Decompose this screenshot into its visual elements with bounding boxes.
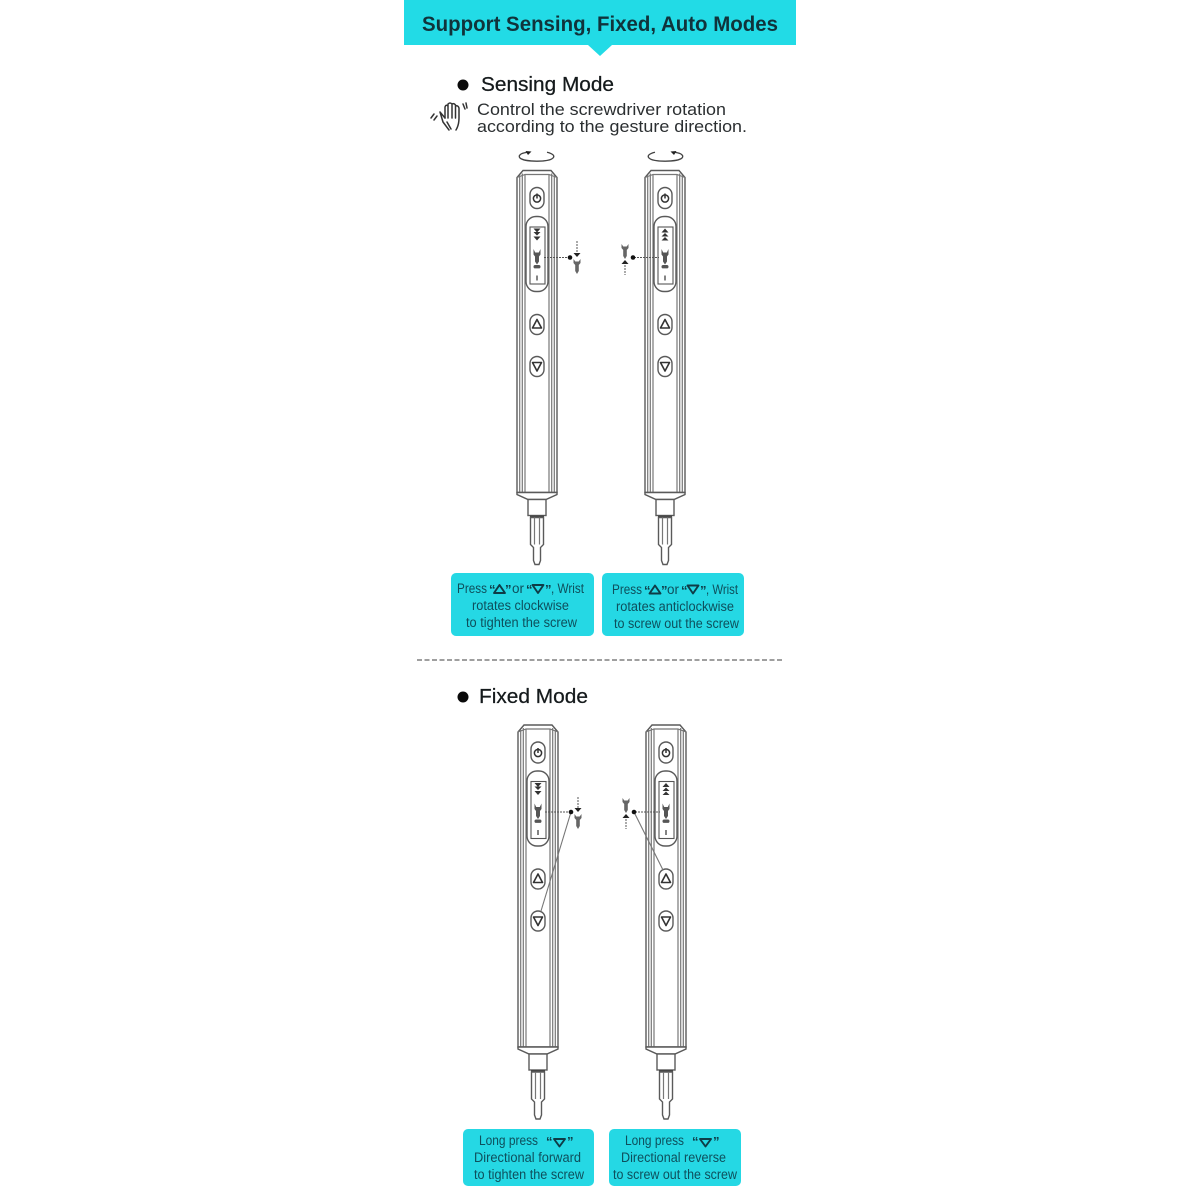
callout: press wrist clockwise: Press [457,581,487,596]
description: sensing mode: Control the screwdriver rotation [477,100,726,119]
callout: press wrist anticlockwise: “ [681,583,688,598]
indicator: forward screw with down button link [541,797,582,911]
screwdriver: fixed forward [518,725,558,1119]
callout: long press forward: to tighten the screw [474,1167,584,1182]
callout: long press forward: Directional forward [474,1150,581,1165]
callout: long press reverse: Directional reverse [621,1150,726,1165]
description: sensing mode: according to the gesture direction. [477,117,747,136]
callout: long press forward: Long press [479,1133,538,1148]
rotation arrow: anticlockwise [648,151,683,161]
screwdriver: sensing clockwise [517,170,557,564]
indicator: reverse screw with up button link [622,798,663,870]
heading: sensing mode: Sensing Mode [481,74,614,96]
callout: press wrist anticlockwise [602,573,744,636]
callout: long press forward: “ [546,1134,552,1149]
title banner: Support Sensing, Fixed, Auto Modes [422,12,778,36]
callout: press wrist clockwise [451,573,594,636]
callout: press wrist clockwise: , Wrist [551,581,584,596]
callout: press wrist anticlockwise: Press [612,582,642,597]
callout: press wrist clockwise: “ [526,582,532,597]
callout: press wrist clockwise: rotates clockwise [472,598,569,613]
indicator: loosen screw [622,244,659,275]
icon: gesture hand [431,103,467,130]
callout: press wrist anticlockwise: to screw out the screw [614,616,739,631]
callout: press wrist clockwise: “ [489,582,496,597]
screwdriver: sensing anticlockwise [645,170,685,564]
callout: press wrist anticlockwise: “ [644,583,650,598]
callout: long press reverse: ” [713,1134,720,1149]
callout: long press reverse: to screw out the screw [613,1167,737,1182]
heading: fixed mode: Fixed Mode [479,686,588,708]
callout: long press forward: ” [567,1134,574,1149]
callout: press wrist anticlockwise: rotates anticlockwise [616,599,734,614]
section divider [417,659,782,661]
rotation arrow: clockwise [519,151,554,161]
callout: press wrist clockwise: to tighten the screw [466,615,577,630]
callout: press wrist anticlockwise: , Wrist [706,582,738,597]
title banner [404,0,796,56]
callout: long press reverse: Long press [625,1133,684,1148]
callout: press wrist anticlockwise: or [667,582,679,597]
callout: press wrist anticlockwise: ” [700,583,706,598]
callout: press wrist clockwise: ” [505,582,512,597]
callout: long press reverse: “ [692,1134,698,1149]
callout: press wrist clockwise: ” [545,582,552,597]
callout: press wrist clockwise: or [512,581,524,596]
indicator: tighten screw [544,241,580,274]
callout: long press forward [463,1129,594,1186]
callout: long press reverse [609,1129,741,1186]
description: sensing mode [477,100,747,136]
screwdriver: fixed reverse [646,725,686,1119]
callout: press wrist anticlockwise: ” [661,583,668,598]
